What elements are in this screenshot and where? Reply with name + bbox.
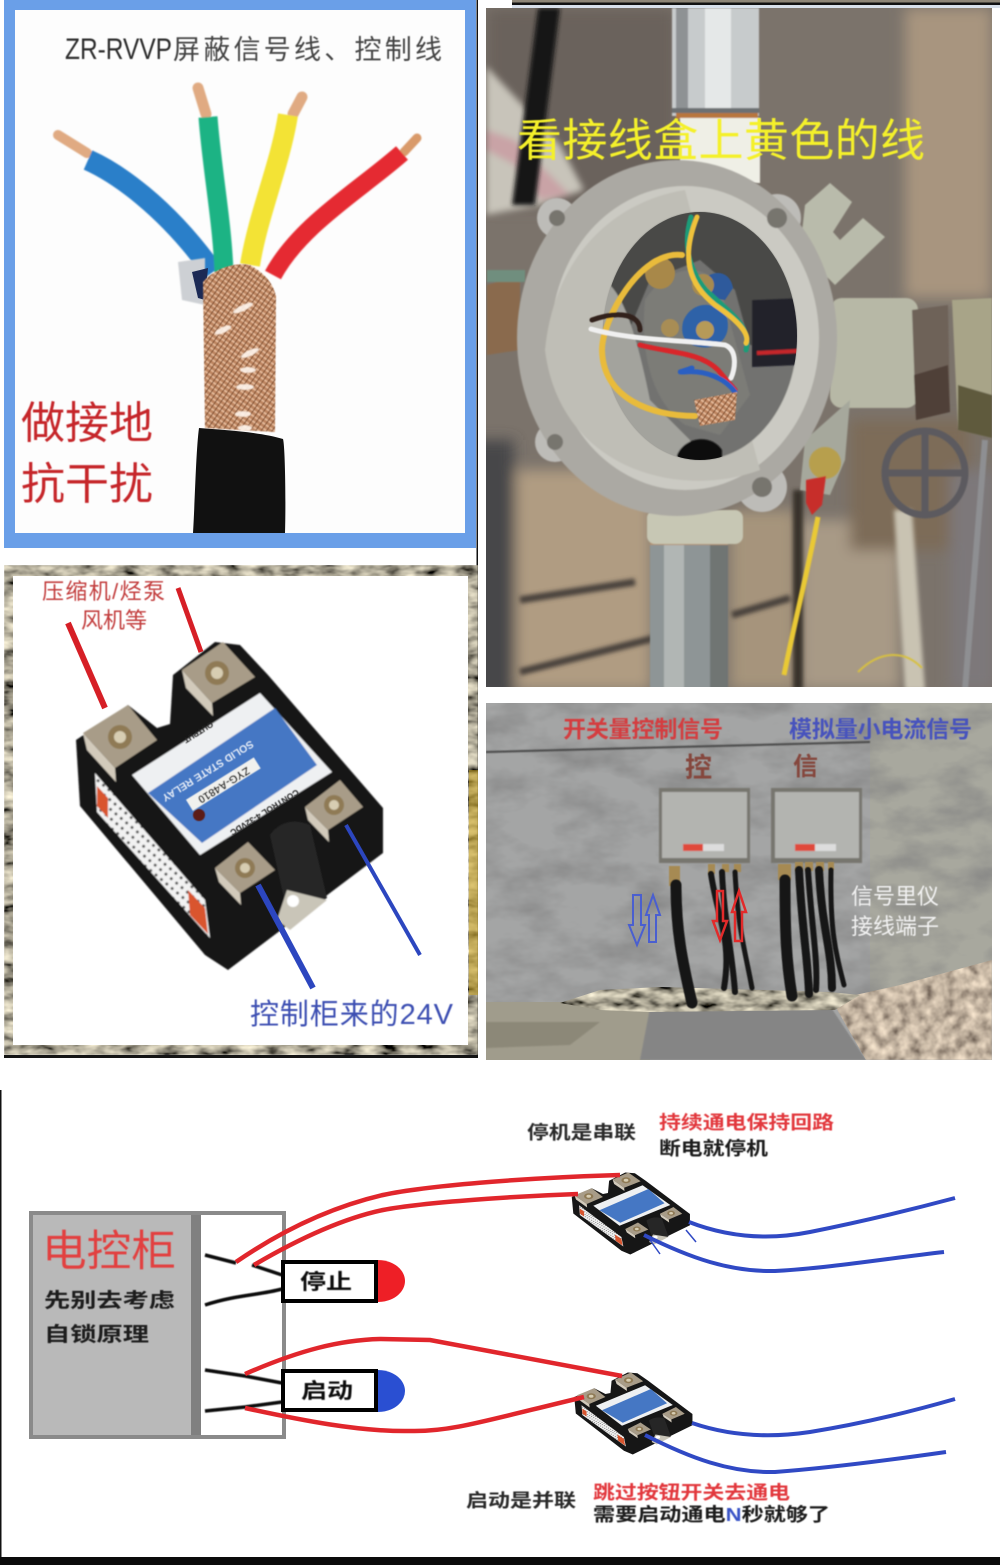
note: stop is series: 持续通电保持回路 bbox=[659, 1112, 835, 1133]
stop button: 停止 bbox=[300, 1271, 352, 1294]
wall and ground bbox=[486, 703, 992, 1060]
note: ignore self locking for now bbox=[44, 1289, 175, 1346]
relay nameplate text: ZYG-A4810 bbox=[196, 764, 252, 805]
note: stop is series: 停机是串联 bbox=[527, 1122, 637, 1143]
panel: wiring schematic bbox=[0, 1090, 1000, 1565]
relay module bbox=[76, 642, 383, 970]
signal box bbox=[771, 788, 862, 863]
relay nameplate text: OUTPUT bbox=[182, 720, 215, 745]
relay: stop circuit bbox=[572, 1172, 690, 1254]
heading: cable type: 屏蔽信号线、控制线 bbox=[173, 35, 442, 65]
wires inside the box bbox=[591, 217, 747, 426]
note: stop is series: 断电就停机 bbox=[659, 1138, 769, 1159]
panel: solid state relay photo bbox=[4, 565, 478, 1058]
labels on the wall bbox=[563, 716, 972, 939]
relay nameplate text: SOLID STATE RELAY bbox=[160, 738, 255, 804]
heading: cable type bbox=[65, 33, 442, 66]
note: ignore self locking for now: 自锁原理 bbox=[44, 1323, 149, 1346]
panel: junction box photo bbox=[470, 8, 995, 700]
label: loads bbox=[42, 579, 165, 633]
photo background bbox=[470, 8, 995, 700]
panel: shielded signal cable photo bbox=[4, 0, 476, 548]
arrows: red signal direction bbox=[713, 891, 746, 941]
arrows: control wires in blue bbox=[258, 825, 420, 988]
junction box ring bbox=[517, 160, 885, 516]
labels on the wall: 信号里仪 bbox=[851, 884, 939, 909]
relay nameplate text bbox=[160, 720, 301, 838]
relay nameplate text: CONTROL 4-32VDC bbox=[228, 787, 301, 838]
labels on the wall: 模拟量小电流信号 bbox=[789, 716, 972, 742]
black terminal wires bbox=[205, 1255, 282, 1411]
note: start is parallel bbox=[466, 1482, 830, 1525]
start button: 启动 bbox=[301, 1380, 353, 1403]
background objects bbox=[486, 66, 584, 215]
note: ignore self locking for now: 先别去考虑 bbox=[44, 1289, 175, 1312]
arrows: load wires in red bbox=[68, 588, 201, 708]
heading: look at the yellow wire: 看接线盒上黄色的线 bbox=[517, 115, 925, 166]
control cabinet bbox=[31, 1213, 284, 1437]
cable glands bbox=[669, 862, 834, 886]
cables bbox=[676, 870, 844, 1003]
labels on the wall: 开关量控制信号 bbox=[563, 716, 723, 742]
red wires: start in parallel bbox=[245, 1339, 622, 1431]
valve wheel bbox=[885, 430, 985, 690]
labels on the wall: 信 bbox=[793, 753, 818, 781]
note: stop is series bbox=[527, 1112, 835, 1159]
stop button bbox=[283, 1260, 405, 1302]
heading: cable type: ZR-RVVP bbox=[65, 33, 172, 66]
arrows: blue signal direction bbox=[629, 895, 660, 945]
callout: grounding anti-interference: 抗干扰 bbox=[21, 460, 153, 509]
note: start is parallel: 启动是并联 bbox=[466, 1490, 577, 1511]
label: control cabinet: 电控柜 bbox=[42, 1228, 176, 1276]
label: loads: 压缩机/烃泵 bbox=[42, 579, 165, 604]
label: 24V from control cabinet: 控制柜来的24V bbox=[250, 998, 454, 1031]
note: start is parallel: 需要启动通电 N秒就够了 bbox=[593, 1504, 830, 1525]
panel: wall mounted boxes photo bbox=[486, 703, 992, 1060]
illustration: four core cable with braided shield bbox=[58, 88, 417, 533]
callout: grounding anti-interference: 做接地 bbox=[21, 399, 153, 448]
label: loads: 风机等 bbox=[81, 608, 147, 633]
interior of junction box bbox=[600, 207, 800, 470]
callout: grounding anti-interference bbox=[21, 399, 153, 509]
grounding lug and yellow ground wire bbox=[784, 447, 922, 675]
pipes bbox=[487, 8, 992, 690]
labels on the wall: 控 bbox=[685, 753, 712, 783]
red wires: stop in series bbox=[236, 1175, 620, 1265]
blue wires: stop relay control side bbox=[644, 1198, 955, 1271]
labels on the wall: 接线端子 bbox=[851, 914, 939, 939]
blue wires: start relay control side bbox=[645, 1399, 955, 1472]
relay: start circuit bbox=[574, 1372, 692, 1454]
control box bbox=[659, 788, 750, 863]
panel divider bbox=[476, 0, 1000, 1056]
start button bbox=[283, 1370, 405, 1412]
note: start is parallel: 跳过按钮开关去通电 bbox=[593, 1482, 790, 1503]
